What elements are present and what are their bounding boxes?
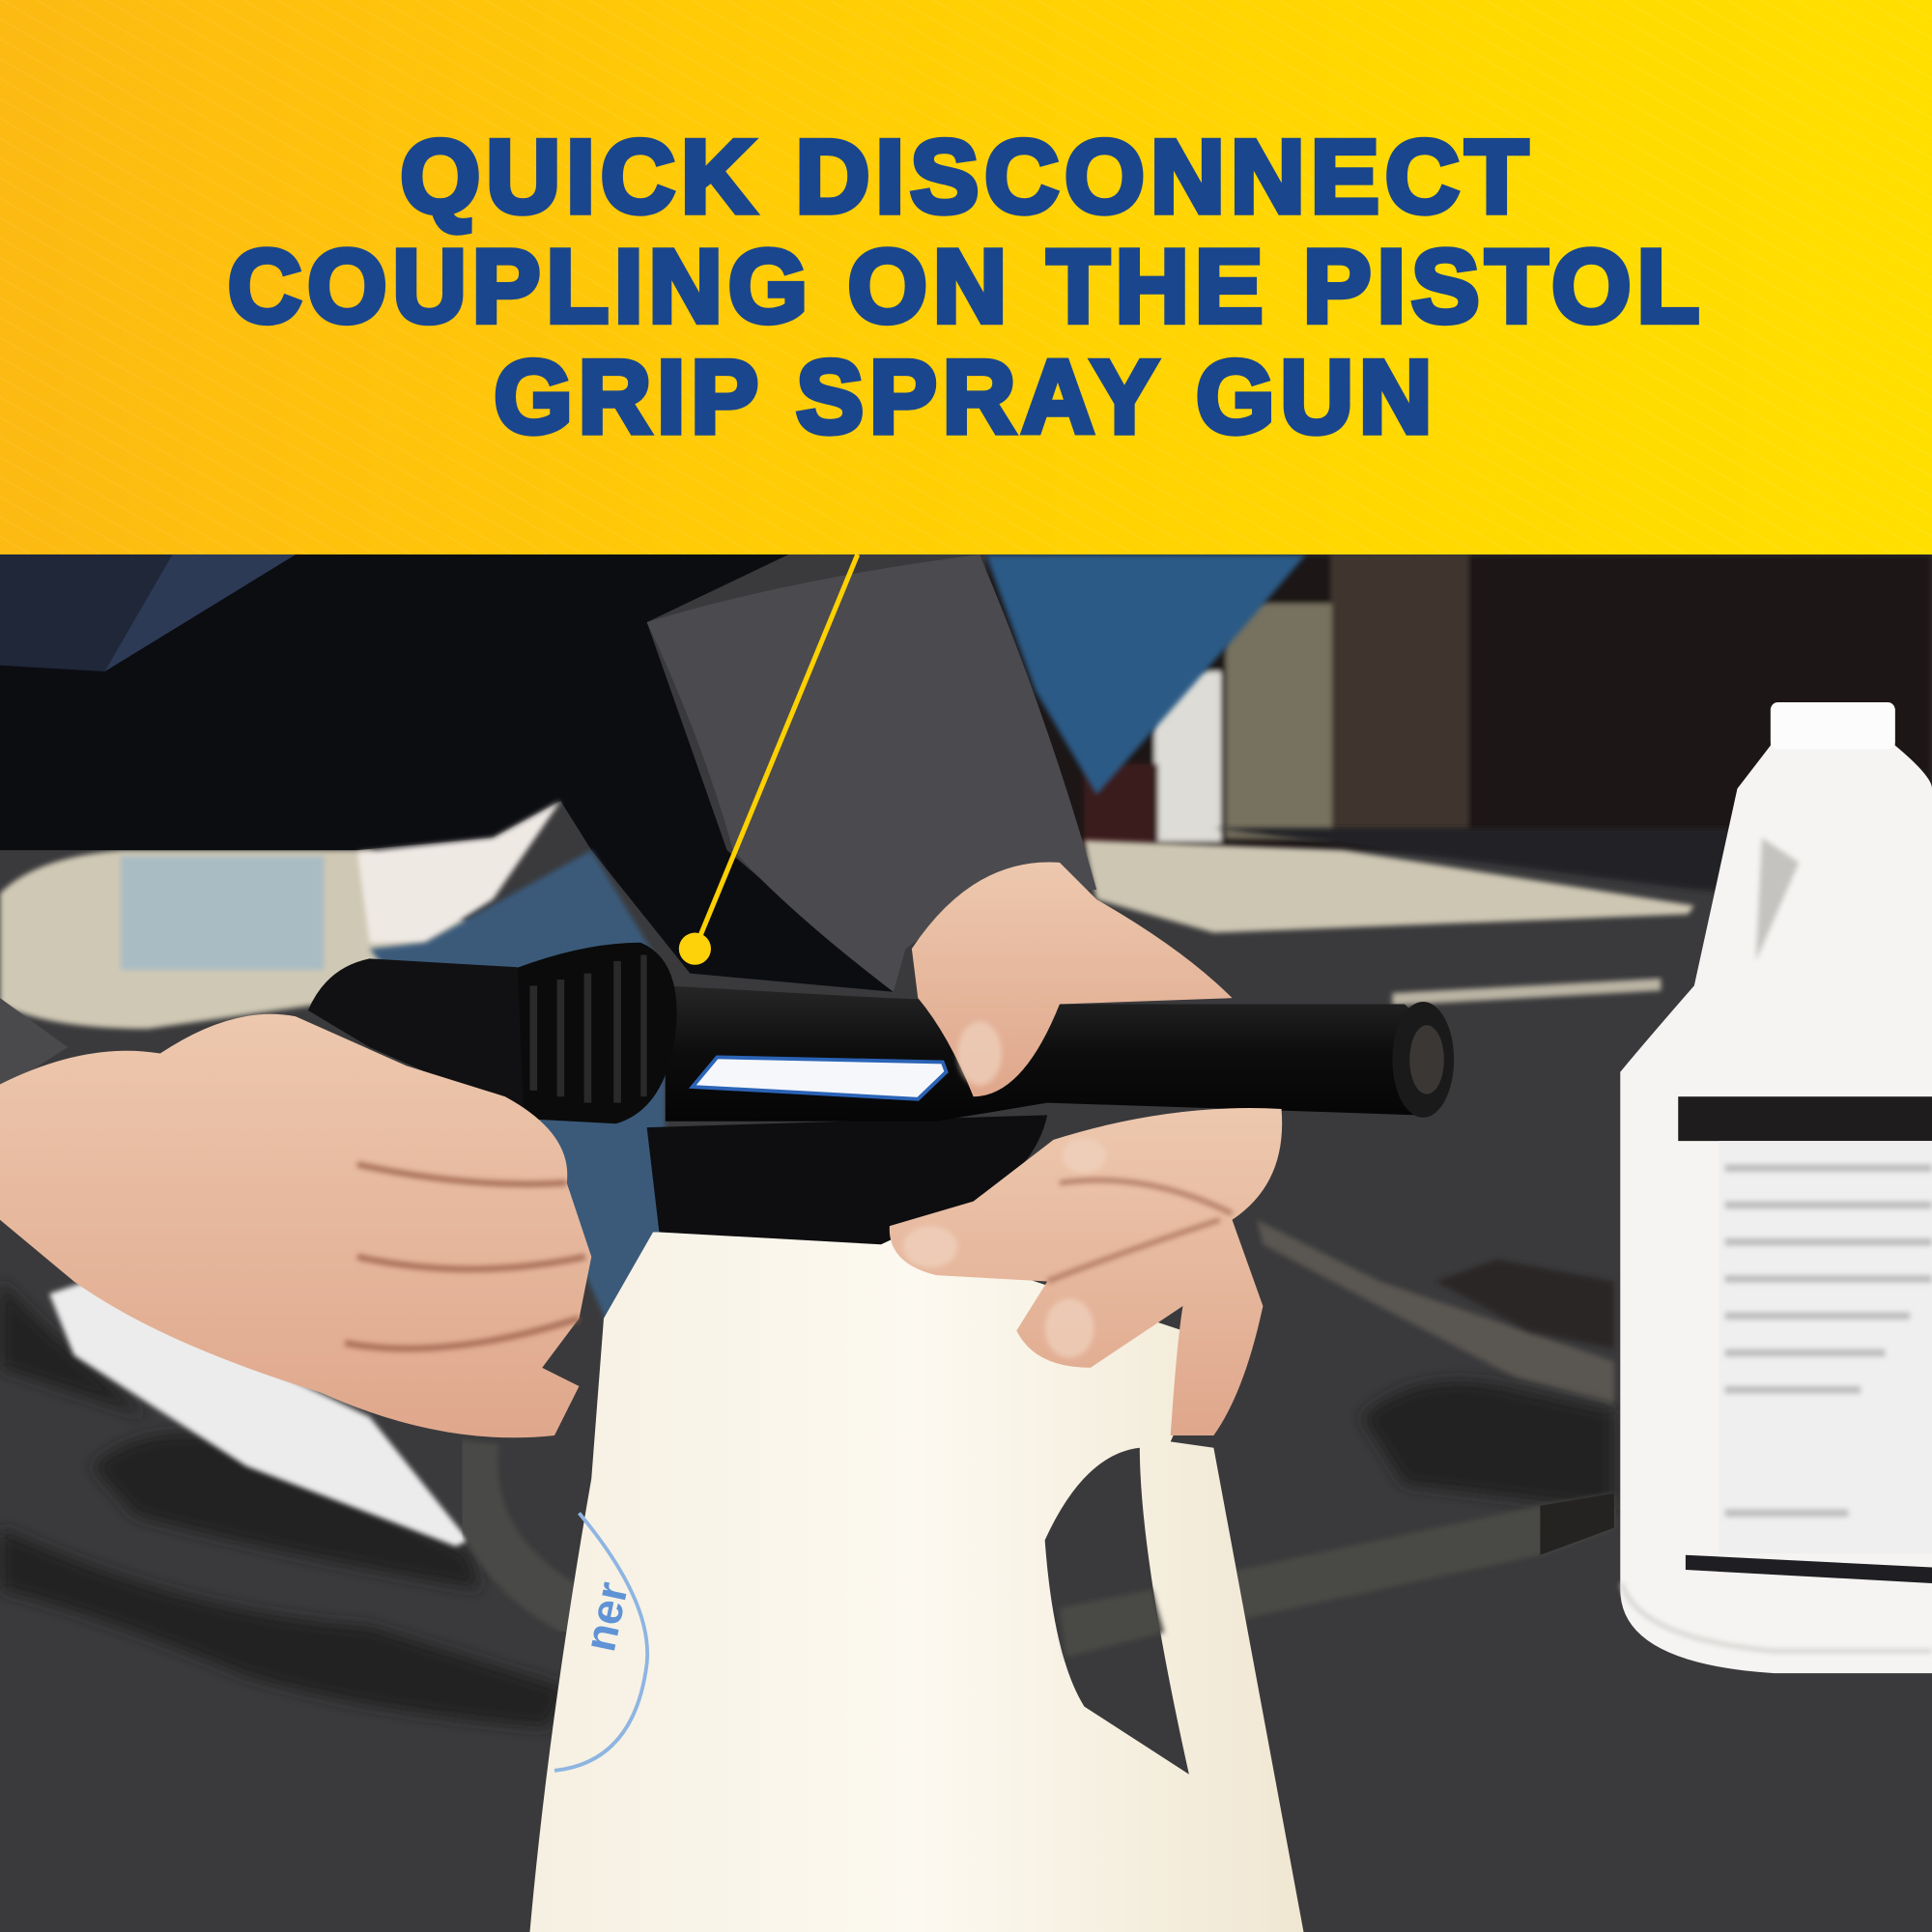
fingernails xyxy=(903,1021,1106,1358)
sprayer bottle xyxy=(529,1233,1303,1932)
background building xyxy=(985,554,1932,850)
right hand over gun xyxy=(912,862,1233,1096)
bottle handle cutout xyxy=(1045,1448,1189,1775)
hose xyxy=(1060,1493,1614,1658)
black cap xyxy=(647,1115,1047,1244)
right hand fingers under gun xyxy=(890,1108,1282,1435)
hose through handle xyxy=(1060,1589,1164,1658)
background container left xyxy=(121,856,324,970)
drain strip xyxy=(1257,1220,1614,1405)
blue and white gun label xyxy=(693,1057,947,1099)
jeans lower xyxy=(370,850,666,1343)
knuckle shadows left hand xyxy=(345,1164,585,1349)
grey sleeve xyxy=(647,554,1096,992)
jacket shoulder xyxy=(0,554,296,671)
worker torso xyxy=(0,554,894,992)
bottle logo text: ner xyxy=(574,1577,638,1656)
paper sheet xyxy=(357,801,560,943)
left hand on grip xyxy=(0,1014,591,1437)
jeans upper xyxy=(985,554,1306,795)
header banner xyxy=(0,0,1932,554)
chemical jug xyxy=(1620,702,1932,1673)
callout pointer to coupling xyxy=(679,554,858,965)
title: GRIP SPRAY GUN xyxy=(494,339,1438,455)
curb line xyxy=(1392,979,1661,1006)
quick disconnect coupling xyxy=(502,943,676,1123)
logo on bottle xyxy=(554,1513,647,1771)
curled hose xyxy=(473,1441,579,1614)
nozzle opening xyxy=(1392,1002,1454,1118)
photo: spray gun demonstration xyxy=(0,554,1932,1932)
hose dark end xyxy=(1540,1493,1614,1555)
drain grate xyxy=(1435,1260,1614,1350)
ground shadows xyxy=(0,1282,1614,1727)
pistol grip rear xyxy=(308,958,524,1115)
sidewalk shadow strip xyxy=(1213,828,1932,906)
finger lines right hand xyxy=(1047,1180,1233,1282)
pavement background xyxy=(0,554,1932,1932)
white sheet under hand xyxy=(49,1282,469,1547)
sidewalk left xyxy=(0,850,518,1029)
title xyxy=(228,118,1705,455)
sidewalk right xyxy=(1084,840,1694,933)
title: QUICK DISCONNECT xyxy=(401,118,1534,234)
left sleeve xyxy=(0,998,68,1091)
jacket shoulder highlight xyxy=(104,554,296,671)
title: COUPLING ON THE PISTOL xyxy=(228,228,1705,344)
black spray gun head xyxy=(666,985,1448,1122)
